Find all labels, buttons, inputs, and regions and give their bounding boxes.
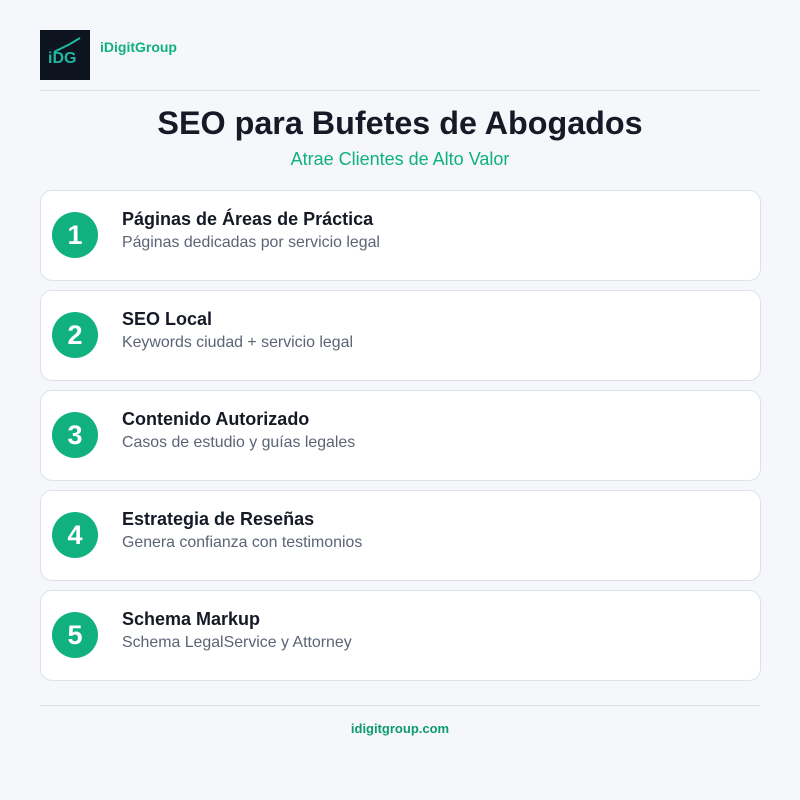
card 2	[40, 290, 761, 381]
card 1	[40, 190, 761, 281]
logo: iDG	[48, 50, 76, 67]
title: SEO para Bufetes de Abogados	[157, 105, 643, 141]
card 2: 2	[67, 320, 83, 350]
logo	[40, 30, 90, 80]
card 2: SEO Local	[122, 309, 212, 329]
card 4: Estrategia de Reseñas	[122, 509, 314, 529]
card 5: 5	[67, 620, 83, 650]
card 5: Schema Markup	[122, 609, 260, 629]
card 3	[40, 390, 761, 481]
subtitle: Atrae Clientes de Alto Valor	[291, 149, 509, 169]
card 4: Genera confianza con testimonios	[122, 534, 362, 551]
footer: idigitgroup.com	[351, 721, 449, 736]
card 5	[40, 590, 761, 681]
card 1: Páginas de Áreas de Práctica	[122, 209, 373, 229]
card 1: Páginas dedicadas por servicio legal	[122, 234, 380, 251]
card 3: Casos de estudio y guías legales	[122, 434, 355, 451]
card 1: 1	[67, 220, 83, 250]
card 4	[40, 490, 761, 581]
card 4: 4	[67, 520, 83, 550]
card 2: Keywords ciudad + servicio legal	[122, 334, 353, 351]
card 5: Schema LegalService y Attorney	[122, 634, 352, 651]
card 3: Contenido Autorizado	[122, 409, 309, 429]
brand name: iDigitGroup	[100, 39, 177, 55]
card 3: 3	[67, 420, 83, 450]
